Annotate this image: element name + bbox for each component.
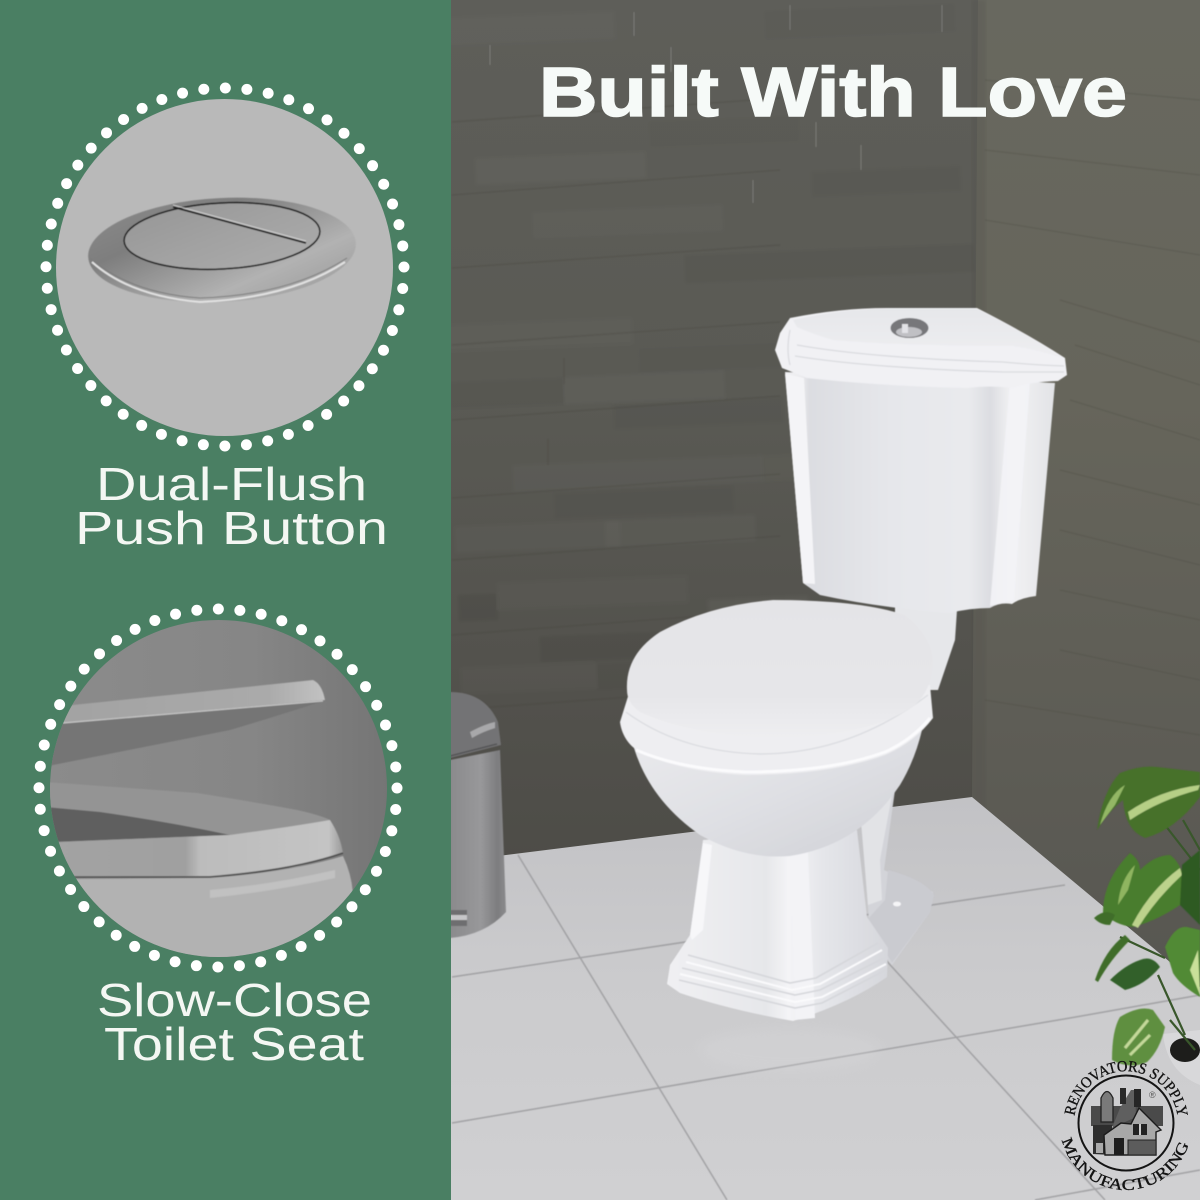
label: Slow-Close Toilet Seat: Toilet Seat <box>104 1018 364 1070</box>
logo text: ® <box>1149 1090 1156 1100</box>
toilet seat rim <box>620 685 933 775</box>
logo text <box>1062 1060 1188 1190</box>
feature 2: slow-close toilet seat <box>39 609 397 1070</box>
toilet rear trap and floor flange <box>860 790 934 965</box>
panel: green feature sidebar <box>0 0 451 1200</box>
title: Built With Love <box>539 53 1127 131</box>
feature 1: dual-flush push button <box>46 88 404 554</box>
photo circle: toilet seat <box>40 620 387 960</box>
tank lid <box>775 308 1067 388</box>
label: Slow-Close Toilet Seat <box>97 974 372 1070</box>
label: Slow-Close Toilet Seat: Slow-Close <box>97 974 372 1026</box>
plant stems <box>1120 820 1200 1050</box>
toilet tank neck <box>895 605 957 690</box>
seat shadow line <box>73 853 343 877</box>
plant <box>1094 767 1200 1085</box>
plant leaves <box>1094 767 1200 1066</box>
photo circle: flush button <box>56 99 393 436</box>
flush button <box>890 318 928 338</box>
toilet <box>620 308 1067 1021</box>
label: Dual-Flush Push Button: Push Button <box>75 502 388 554</box>
toilet tank <box>775 308 1067 613</box>
brand logo: Renovators Supply Manufacturing <box>1062 1060 1188 1190</box>
logo text: MANUFACTURING <box>1062 1136 1188 1190</box>
trash bin <box>450 692 506 938</box>
label: Dual-Flush Push Button <box>75 458 388 554</box>
dotted ring <box>46 88 404 446</box>
right wall with tiles <box>972 0 1200 1000</box>
bowl <box>76 856 353 957</box>
panel: photo of corner toilet in bathroom <box>451 0 1200 1200</box>
raised lid <box>52 704 312 766</box>
dotted ring <box>39 609 397 967</box>
logo text: RENOVATORS SUPPLY <box>1064 1060 1188 1116</box>
chrome plate <box>88 197 356 304</box>
toilet pedestal <box>667 830 888 1021</box>
left wall with tiles <box>434 0 991 870</box>
logo house illustration <box>1091 1088 1163 1155</box>
toilet seat lid <box>627 600 933 738</box>
tiled floor <box>450 797 1200 1200</box>
label: Dual-Flush Push Button: Dual-Flush <box>96 458 367 510</box>
toilet bowl <box>634 730 922 857</box>
closed seat surface <box>50 782 329 867</box>
seat front band <box>57 820 343 877</box>
plant pot <box>1163 1030 1200 1085</box>
